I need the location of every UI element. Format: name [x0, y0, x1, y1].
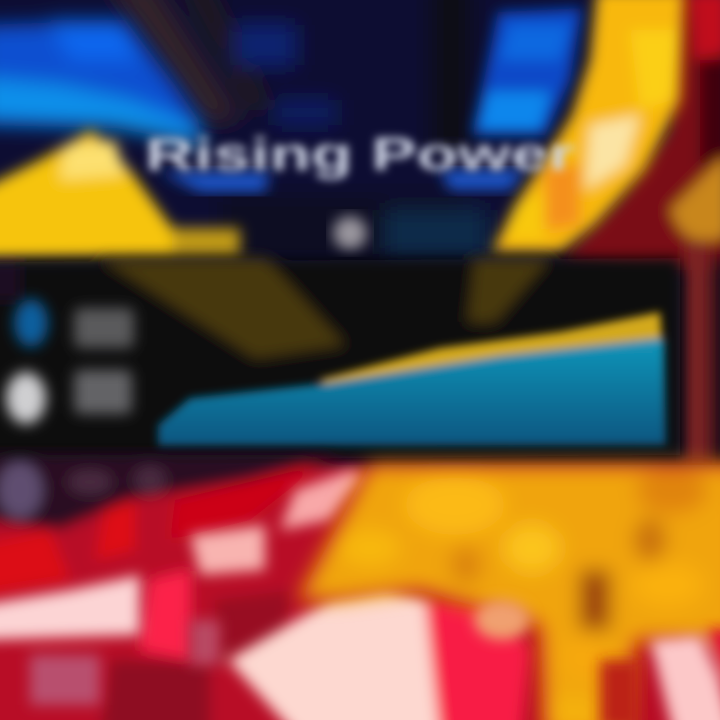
- peach patch: [474, 600, 640, 720]
- stat two: [74, 370, 132, 414]
- icon: blue marker: [14, 299, 48, 347]
- legend: left stats: [6, 299, 134, 424]
- icon: centre emblem: [333, 216, 367, 250]
- blue panel right: [472, 8, 582, 135]
- yellow arc right: [492, 0, 684, 252]
- icon: white marker: [6, 372, 46, 424]
- blue band under title: [160, 170, 525, 192]
- area chart: [158, 312, 666, 446]
- white patches left: [0, 470, 530, 720]
- subtitle: Growth over time: [255, 275, 445, 295]
- yellow triangle left: [0, 130, 240, 258]
- white patches right: [650, 630, 720, 720]
- stat one: [74, 308, 134, 348]
- chart line: [318, 312, 662, 386]
- dark red right column: [560, 0, 720, 505]
- yellow block field: [298, 465, 720, 720]
- blue band left: [0, 20, 205, 145]
- panel: bottom background: [0, 455, 720, 720]
- title: Rising Power: [145, 128, 575, 180]
- panel: chart band: [0, 258, 680, 462]
